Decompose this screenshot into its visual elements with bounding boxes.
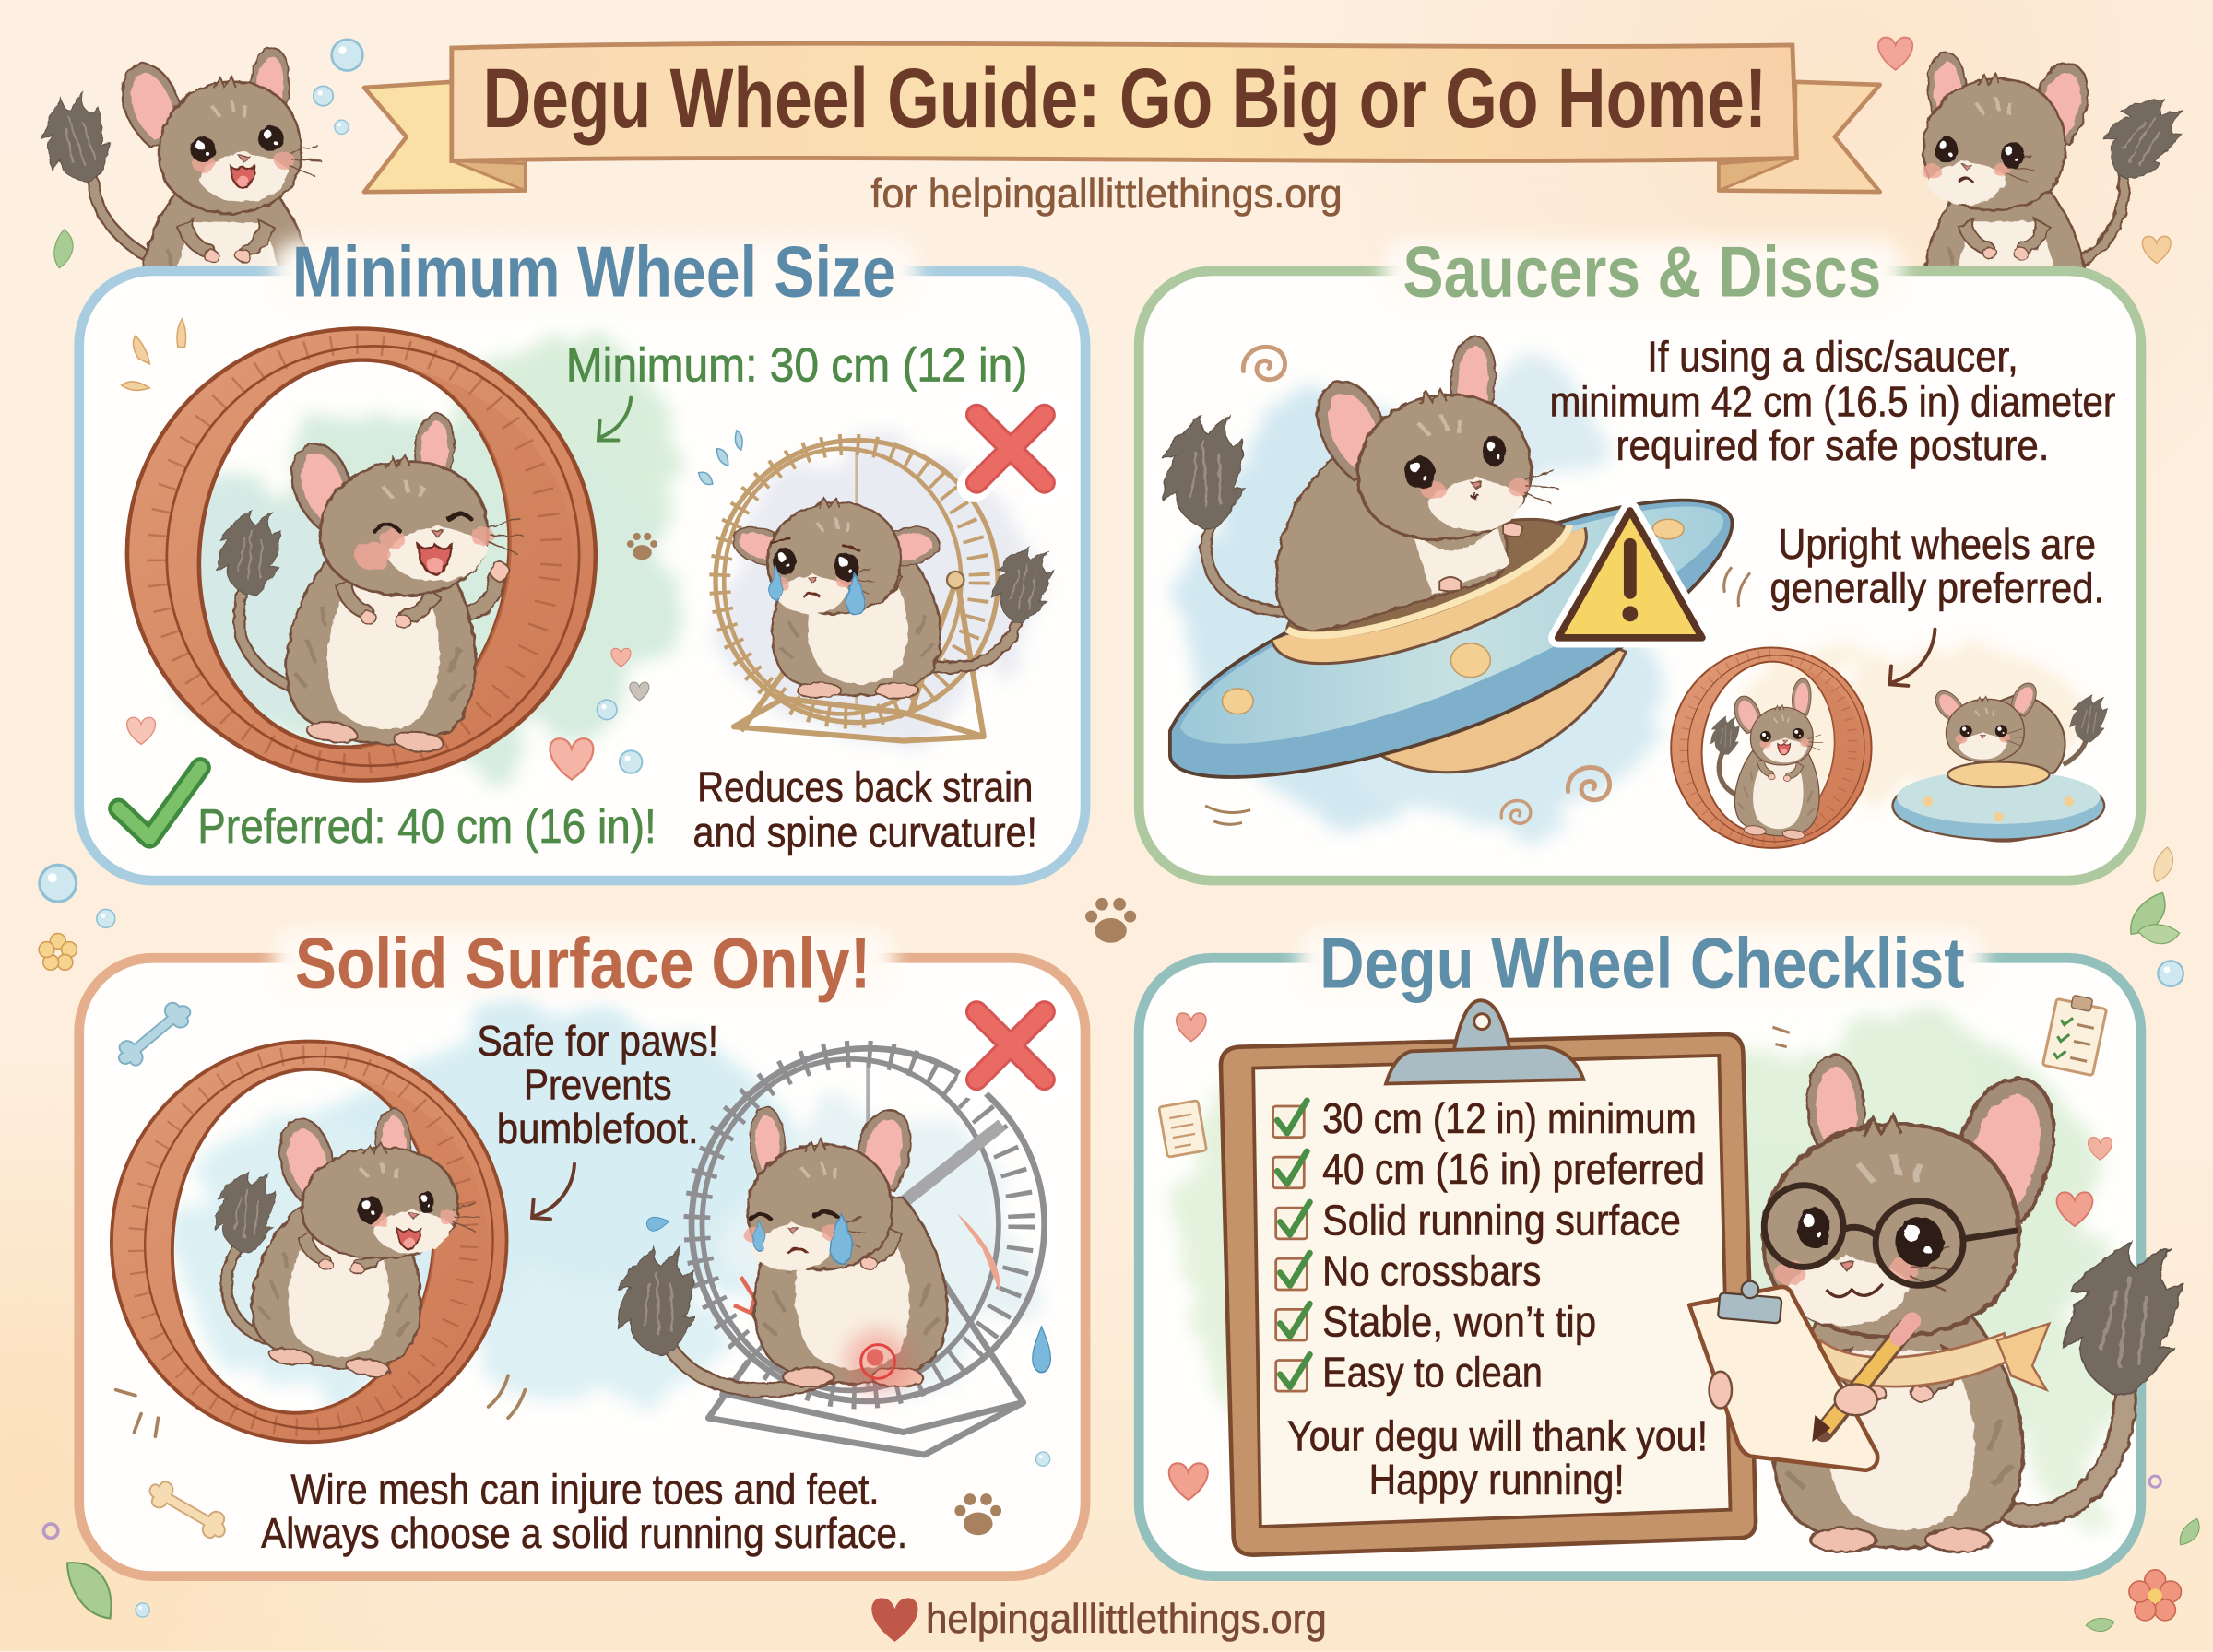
arrow: to wheel xyxy=(598,398,631,441)
footer: website: helpingalllittlethings.org xyxy=(926,1597,1327,1642)
illustration: solid wooden wheel with degu xyxy=(91,1021,527,1461)
title ribbon xyxy=(364,43,1880,192)
text: safe for paws: Safe for paws! xyxy=(477,1017,718,1065)
text: safe for paws: bumblefoot. xyxy=(497,1104,699,1152)
text: disc minimum xyxy=(1550,333,2115,469)
wash: green and blue behind wheel xyxy=(148,332,1037,769)
illustration: saucer with degu xyxy=(1156,335,1732,777)
closing message: Your degu will thank you! xyxy=(1287,1411,1708,1459)
small clipboard xyxy=(1689,1281,1877,1470)
checklist items: Solid running surface xyxy=(1322,1196,1681,1244)
label: preferred size: Preferred: 40 cm (16 in)! xyxy=(197,800,657,854)
saucer collar xyxy=(1284,523,1573,650)
arrow: to solid wheel xyxy=(532,1164,574,1219)
closing message: Happy running! xyxy=(1369,1456,1625,1504)
illustration: small saucer with worried degu xyxy=(1893,679,2109,842)
panel: minimum wheel size xyxy=(79,271,1085,880)
text: disc minimum: If using a disc/saucer, xyxy=(1647,333,2018,381)
text: wire mesh warning: Always choose a solid running surface. xyxy=(261,1509,907,1557)
decorations: bones xyxy=(112,996,232,1543)
subtitle: for helpingalllittlethings.org xyxy=(870,171,1343,217)
icon: red cross xyxy=(974,412,1047,486)
illustration: checklist clipboard xyxy=(1221,1000,1756,1555)
checklist items xyxy=(1273,1094,1705,1397)
flower xyxy=(39,933,77,970)
text: wire mesh warning xyxy=(261,1466,907,1557)
illustration: small wheel with happy degu xyxy=(1660,636,1883,859)
text: reduces back strain: and spine curvature! xyxy=(693,808,1037,856)
checklist items: Easy to clean xyxy=(1322,1349,1543,1397)
panel: degu wheel checklist xyxy=(1139,958,2141,1576)
clip xyxy=(1386,1000,1583,1083)
happy running degu xyxy=(218,412,524,756)
text: reduces back strain xyxy=(693,762,1037,856)
text: upright wheels: generally preferred. xyxy=(1769,564,2104,612)
text: upright wheels xyxy=(1769,520,2104,612)
panel: solid surface only xyxy=(79,958,1085,1576)
label: minimum size: Minimum: 30 cm (12 in) xyxy=(566,338,1027,392)
icon: warning triangle xyxy=(1558,511,1702,638)
arrow: to small wheel xyxy=(1889,630,1935,686)
degu mascot: top right, worried xyxy=(1922,52,2192,370)
glasses xyxy=(1764,1186,2018,1285)
text: safe for paws: Prevents xyxy=(524,1060,672,1108)
pencil xyxy=(1812,1321,1912,1442)
text: wire mesh warning: Wire mesh can injure toes and feet. xyxy=(290,1466,880,1514)
text: upright wheels: Upright wheels are xyxy=(1779,520,2096,568)
checklist items: No crossbars xyxy=(1322,1246,1541,1294)
checklist items: 40 cm (16 in) preferred xyxy=(1322,1145,1705,1193)
wash: green behind degu xyxy=(1186,1016,2124,1510)
decorations: paws xyxy=(627,533,1136,1535)
checklist items: 30 cm (12 in) minimum xyxy=(1322,1094,1697,1142)
illustration: small wire wheel with crying degu xyxy=(716,441,1056,741)
happy degu xyxy=(213,1108,480,1382)
degu figure xyxy=(1763,1053,2184,1552)
injury glow xyxy=(846,1329,910,1394)
degu riding saucer xyxy=(1156,335,1558,631)
closing message xyxy=(1287,1411,1708,1504)
icon: heart xyxy=(871,1598,918,1642)
icons: small clipboards xyxy=(1159,992,2108,1157)
text: reduces back strain: Reduces back strain xyxy=(697,762,1033,810)
degu mascot: top left, smiling xyxy=(29,46,322,379)
title: Degu Wheel Guide: Go Big or Go Home! xyxy=(482,52,1767,146)
checklist items: Stable, won’t tip xyxy=(1322,1297,1596,1345)
heading: degu wheel checklist: Degu Wheel Checklist xyxy=(1320,922,1965,1003)
icon: red cross xyxy=(974,1009,1047,1082)
wash: blue behind wheels xyxy=(176,1009,1024,1404)
illustration: wire mesh wheel with hurt degu xyxy=(611,1048,1045,1455)
decorations: swirls and motion marks xyxy=(116,319,1790,1436)
illustration: degu with glasses and clipboard xyxy=(1689,1053,2184,1552)
heading: saucers and discs: Saucers & Discs xyxy=(1402,230,1881,312)
crying degu xyxy=(728,498,1056,698)
flower xyxy=(2129,1570,2182,1621)
icon: green check xyxy=(119,768,200,838)
heading: minimum wheel size: Minimum Wheel Size xyxy=(292,230,896,312)
text: disc minimum: minimum 42 cm (16.5 in) diameter xyxy=(1550,378,2115,426)
heading: solid surface only: Solid Surface Only! xyxy=(295,922,870,1003)
wash: blue behind saucer xyxy=(1192,360,2089,832)
text: disc minimum: required for safe posture. xyxy=(1616,421,2049,469)
hurt degu xyxy=(611,1104,947,1390)
illustration: large wooden wheel with happy degu xyxy=(101,301,621,808)
panel: saucers and discs xyxy=(1139,271,2141,880)
scarf xyxy=(1820,1324,2049,1390)
text: safe for paws xyxy=(477,1017,718,1152)
